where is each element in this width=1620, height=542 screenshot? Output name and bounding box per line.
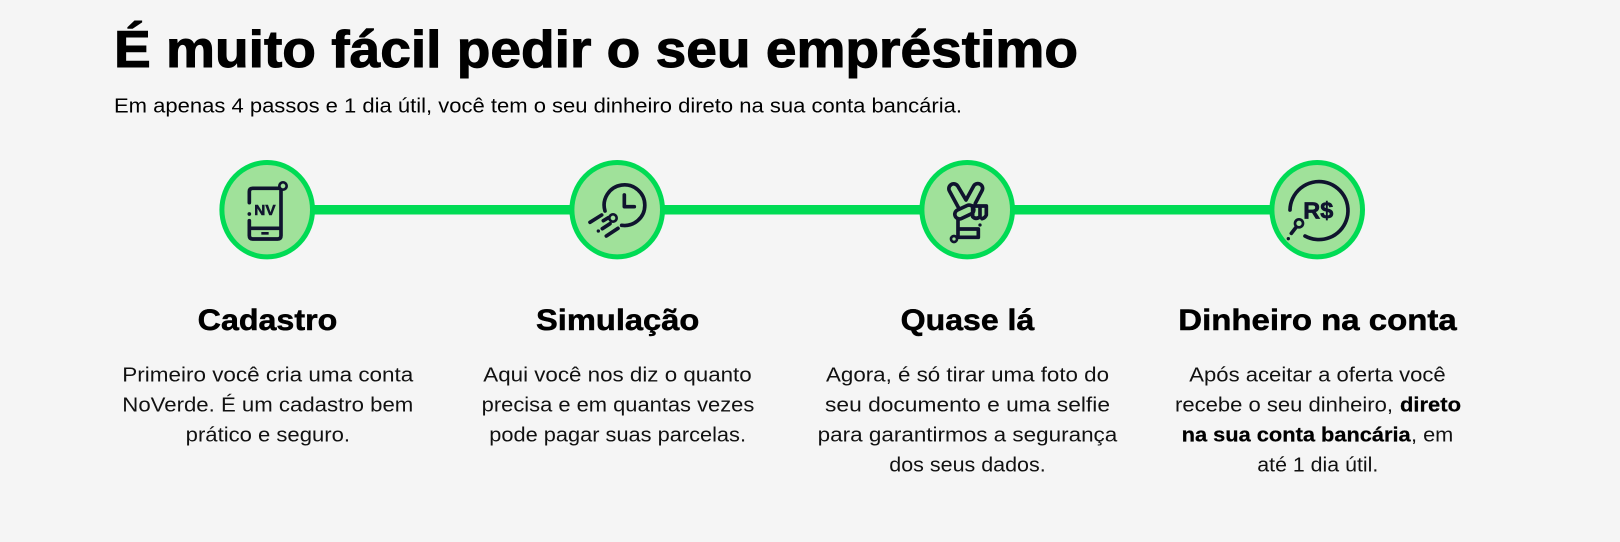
step 2 text: precisa e em quantas vezes	[482, 395, 754, 417]
step 3 circle	[922, 162, 1012, 257]
step 2 text: Aqui você nos diz o quanto	[483, 365, 752, 387]
step 3 text: dos seus dados.	[889, 455, 1046, 477]
timeline connector	[267, 205, 1317, 214]
step 4 text: direto	[1400, 395, 1461, 417]
step 3 text: seu documento e uma selfie	[825, 395, 1110, 417]
title: É muito fácil pedir o seu empréstimo	[114, 21, 1078, 79]
step 4 circle	[1272, 162, 1362, 257]
step 3 heading: Quase lá	[901, 304, 1035, 337]
icon: phone	[247, 182, 287, 239]
step 2 text: pode pagar suas parcelas.	[489, 425, 746, 447]
step 2 heading: Simulação	[536, 304, 699, 337]
step 3: quase lá	[818, 162, 1118, 477]
step 1 text: prático e seguro.	[186, 425, 350, 447]
step 1 circle	[222, 162, 312, 257]
icon: money: R$	[1303, 198, 1333, 224]
step 2: simulação	[482, 162, 754, 447]
step 1 text: NoVerde. É um cadastro bem	[122, 394, 413, 417]
step 4 heading: Dinheiro na conta	[1178, 304, 1457, 337]
step 4 text	[1175, 365, 1461, 477]
step 4: dinheiro na conta	[1175, 162, 1461, 477]
icon: money	[1287, 182, 1348, 240]
step 4 text: na sua conta bancária	[1182, 425, 1412, 447]
step 1: cadastro	[122, 162, 414, 447]
step 2 text	[482, 365, 754, 447]
step 3 text	[818, 365, 1118, 477]
step 4 text: , em	[1411, 425, 1453, 447]
step 4 text: recebe o seu dinheiro,	[1175, 395, 1393, 417]
step 3 text: para garantirmos a segurança	[818, 425, 1118, 447]
subtitle: Em apenas 4 passos e 1 dia útil, você tem o seu dinheiro direto na sua conta bancária.	[114, 94, 962, 118]
step 1 text	[122, 365, 414, 447]
step 4 text: Após aceitar a oferta você	[1189, 365, 1446, 387]
step 1 heading: Cadastro	[198, 304, 337, 337]
icon: phone: NV	[254, 203, 276, 219]
icon: clock	[590, 185, 645, 236]
icon: peace hand	[949, 184, 986, 242]
step 2 circle	[572, 162, 662, 257]
step 4 text: até 1 dia útil.	[1257, 455, 1378, 477]
step 1 text: Primeiro você cria uma conta	[122, 365, 414, 387]
step 3 text: Agora, é só tirar uma foto do	[826, 365, 1109, 387]
